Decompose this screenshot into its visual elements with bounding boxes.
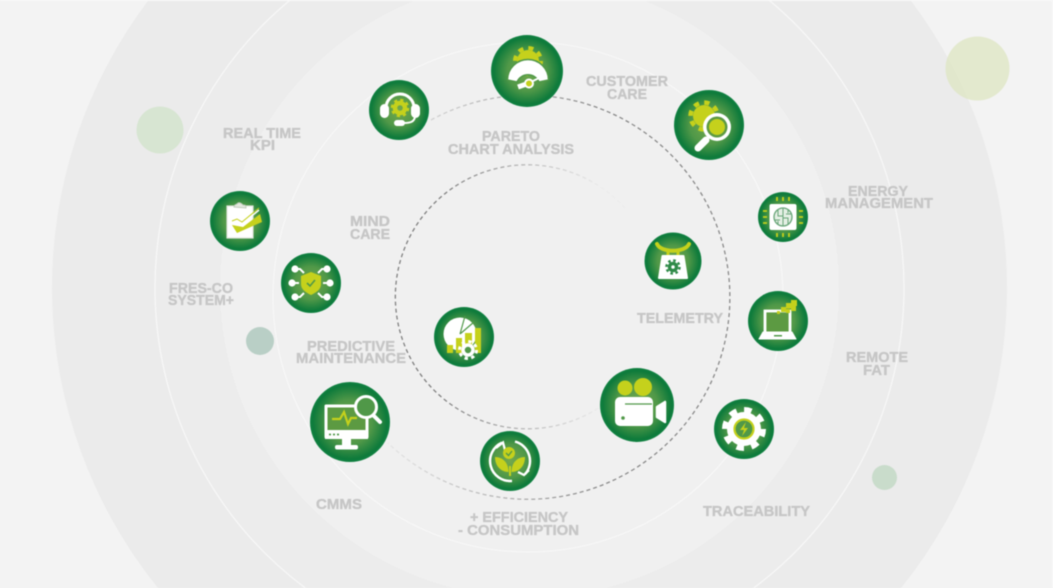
label: fres-co system+: SYSTEM+ xyxy=(168,293,234,309)
label: mind care xyxy=(350,214,390,243)
label: efficiency consumption xyxy=(458,510,579,539)
label: fres-co system+ xyxy=(168,281,234,309)
icon: gear with magnifier xyxy=(674,90,744,160)
label: customer care xyxy=(586,74,669,103)
icon: gear with bolt xyxy=(714,399,774,459)
icon: monitor with magnifier xyxy=(310,382,390,462)
icon: video camera xyxy=(600,368,674,442)
icon: gauge with gear xyxy=(491,35,563,107)
label: real time kpi: REAL TIME xyxy=(223,126,301,142)
label: efficiency consumption: + EFFICIENCY xyxy=(470,510,568,526)
decorative dot: lower left xyxy=(246,327,274,355)
label: energy management xyxy=(825,184,933,212)
icon: headset with gear xyxy=(369,80,429,140)
label: fres-co system+: FRES-CO xyxy=(169,281,233,297)
decorative dot: lower right xyxy=(872,465,897,490)
dashed orbit: inner xyxy=(395,165,625,429)
label: efficiency consumption: - CONSUMPTION xyxy=(458,523,579,539)
icon: clipboard with check xyxy=(210,191,270,251)
dashed orbit: outer xyxy=(388,95,730,499)
icon: brain chip xyxy=(758,192,808,242)
decorative dot: top-right xyxy=(946,36,1010,100)
label: real time kpi: KPI xyxy=(250,138,275,154)
icon: scale with gear xyxy=(644,232,702,290)
label: remote fat: REMOTE xyxy=(846,350,908,366)
label: pareto chart analysis: PARETO xyxy=(482,129,540,145)
label: energy management: MANAGEMENT xyxy=(825,196,933,212)
label: traceability: TRACEABILITY xyxy=(703,504,810,520)
icon: plant with cycle arrows xyxy=(480,431,540,491)
decorative dot: left xyxy=(136,106,184,154)
label: customer care: CARE xyxy=(607,87,647,103)
label: mind care: MIND xyxy=(350,214,390,230)
label: customer care: CUSTOMER xyxy=(586,74,669,90)
label: remote fat: FAT xyxy=(863,363,890,379)
icon: pie and bar chart with gear xyxy=(434,307,494,367)
label: real time kpi xyxy=(223,126,301,154)
label: mind care: CARE xyxy=(350,227,390,243)
icon: laptop with pixels xyxy=(748,291,808,351)
label: telemetry: TELEMETRY xyxy=(637,311,723,327)
label: predictive maintenance: MAINTENANCE xyxy=(296,351,406,367)
label: pareto chart analysis: CHART ANALYSIS xyxy=(448,142,574,158)
label: predictive maintenance: PREDICTIVE xyxy=(307,339,395,355)
label: energy management: ENERGY xyxy=(848,184,908,200)
label: predictive maintenance xyxy=(296,339,406,367)
label: remote fat xyxy=(846,350,908,379)
label: cmms: CMMS xyxy=(316,497,362,513)
icon: shield with circuit xyxy=(281,253,341,313)
label: pareto chart analysis xyxy=(448,129,574,158)
